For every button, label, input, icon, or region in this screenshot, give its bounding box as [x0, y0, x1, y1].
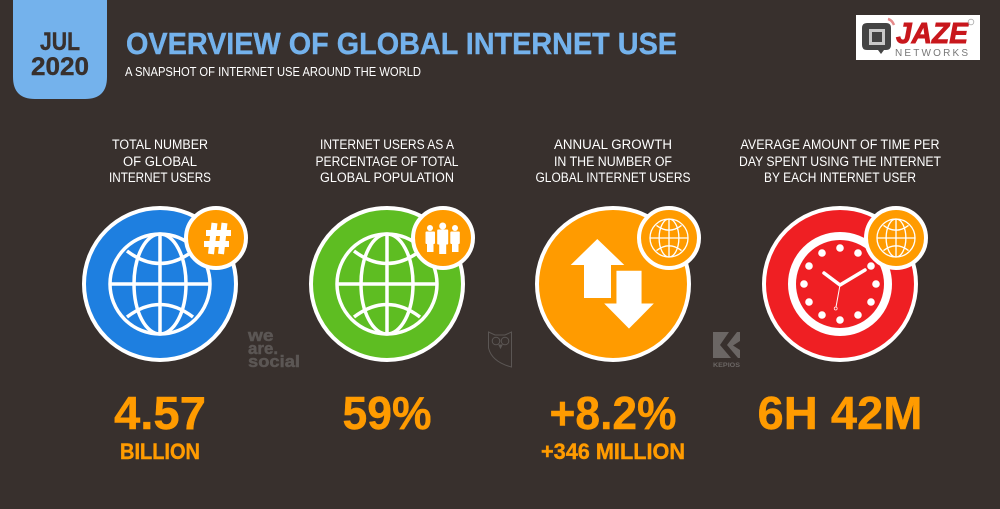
column 3 heading: ANNUAL GROWTH — [554, 137, 672, 152]
stat: +8.2% +346 million — [541, 387, 685, 464]
icon: green globe with people badge — [311, 208, 473, 360]
column 1 heading: TOTAL NUMBER — [112, 137, 208, 152]
column 4 heading: BY EACH INTERNET USER — [764, 170, 916, 185]
stat: 4.57 billion: 4.57 — [114, 387, 206, 439]
column 1 heading: INTERNET USERS — [109, 170, 211, 185]
column 1 heading — [109, 137, 211, 185]
subtitle: A SNAPSHOT OF INTERNET USE AROUND THE WORLD — [125, 65, 421, 79]
logo: we are social: we — [247, 326, 274, 345]
column 2 heading — [316, 137, 459, 185]
logo: Kepios — [713, 332, 741, 369]
column 2 heading: PERCENTAGE OF TOTAL — [316, 154, 459, 169]
column 2 heading: GLOBAL POPULATION — [320, 170, 454, 185]
title: OVERVIEW OF GLOBAL INTERNET USE — [126, 26, 677, 61]
stat: 4.57 billion: BILLION — [120, 439, 200, 464]
stat: 4.57 billion — [114, 387, 206, 464]
column 3 heading: IN THE NUMBER OF — [554, 154, 672, 169]
logo: Jaze Networks — [856, 15, 980, 60]
column 4 heading: DAY SPENT USING THE INTERNET — [739, 154, 941, 169]
column 1 heading: OF GLOBAL — [123, 154, 197, 169]
icon: blue globe with hash badge — [84, 208, 246, 360]
stat: +8.2% +346 million: +346 MILLION — [541, 439, 685, 464]
logo: we are social — [247, 326, 300, 371]
logo: Hootsuite owl — [488, 332, 512, 367]
date tab — [13, 0, 107, 99]
icon: red clock — [764, 208, 926, 360]
date tab: JUL — [40, 28, 80, 56]
stat: 6H 42M: 6H 42M — [758, 387, 922, 439]
icon: orange circle with growth arrows — [537, 208, 699, 360]
logo: Jaze Networks: JAZE — [896, 18, 970, 50]
logo: we are social: social — [248, 352, 300, 371]
stat: +8.2% +346 million: +8.2% — [550, 387, 676, 439]
column 3 heading: GLOBAL INTERNET USERS — [536, 170, 690, 185]
logo: we are social: are. — [248, 339, 278, 358]
logo: Kepios: KEPIOS — [713, 362, 741, 369]
date tab: 2020 — [31, 53, 89, 81]
column 3 heading — [536, 137, 690, 185]
logo: Jaze Networks: NETWORKS — [895, 48, 968, 59]
stat: 59%: 59% — [342, 387, 432, 439]
column 4 heading — [739, 137, 941, 185]
column 4 heading: AVERAGE AMOUNT OF TIME PER — [740, 137, 940, 152]
column 2 heading: INTERNET USERS AS A — [320, 137, 454, 152]
